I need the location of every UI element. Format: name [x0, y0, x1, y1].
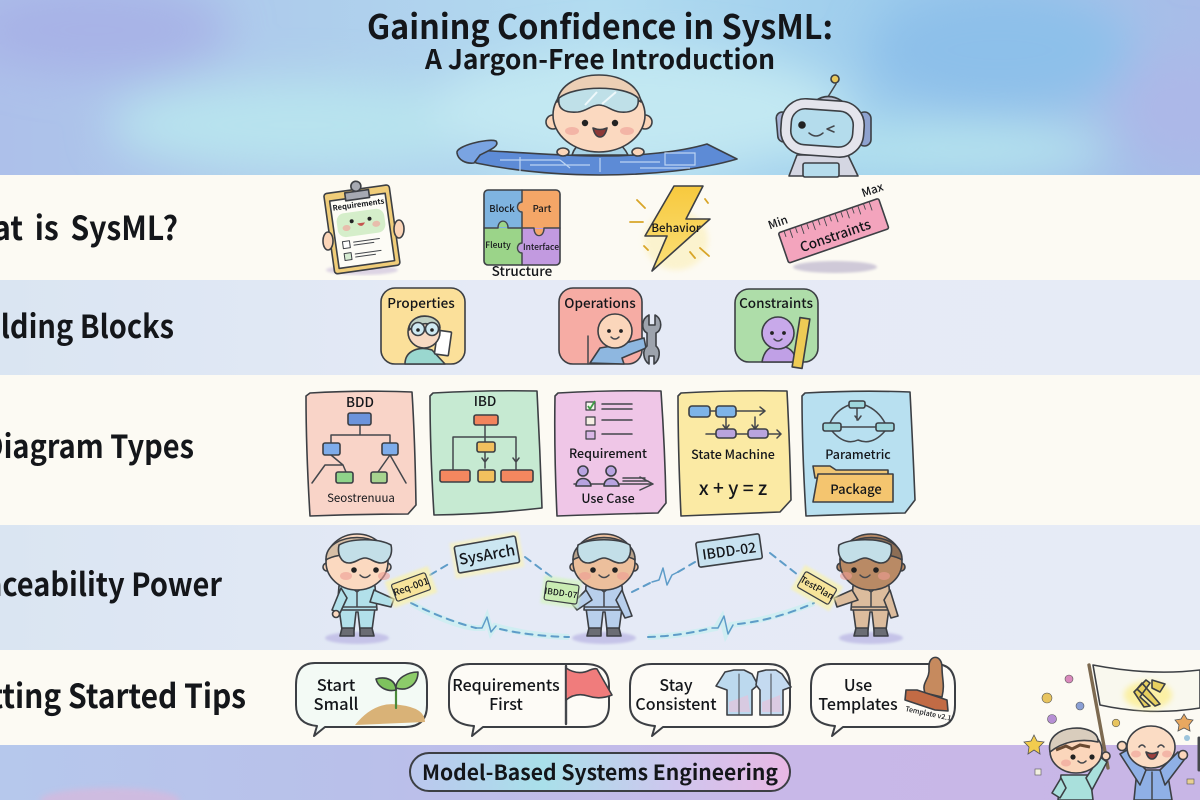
icon: constraints ruler: Min	[766, 212, 790, 233]
celebration: engineers with flag and confetti	[1024, 665, 1200, 800]
diagram card: parametric and package	[802, 391, 915, 516]
worker: left engineer	[323, 534, 394, 644]
diagram card: requirement and use case	[555, 391, 666, 516]
tip bubble: start small	[296, 663, 427, 736]
icon: constraints ruler: Constraints	[797, 213, 873, 256]
icon: structure puzzle: Fleuty	[485, 239, 511, 251]
title: Gaining Confidence in SysML:	[367, 0, 833, 49]
card: constraints: Constraints	[739, 292, 813, 312]
diagram card: parametric and package: Parametric	[825, 444, 891, 463]
tip bubble: use templates: Templates	[818, 691, 898, 715]
tip bubble: use templates	[811, 657, 955, 736]
flag	[1089, 665, 1200, 768]
tag: IBDD-07: IBDD-07	[544, 585, 578, 601]
tag: SysArch: SysArch	[457, 539, 517, 570]
header background	[0, 0, 1200, 180]
tip bubble: requirements first	[449, 664, 612, 736]
tag: Req-001: Req-001	[391, 573, 431, 599]
tip bubble: requirements first: Requirements	[452, 672, 560, 696]
diagram card: state machine	[678, 391, 791, 516]
confetti	[1024, 675, 1194, 784]
card: operations: Operations	[564, 292, 636, 312]
card: constraints	[735, 289, 818, 368]
tip bubble: stay consistent: Consistent	[635, 691, 717, 715]
tag: IBDD-02	[696, 534, 762, 567]
collar and shoulders	[572, 138, 628, 155]
diagram card: requirement and use case: Use Case	[581, 488, 635, 507]
icon: requirements clipboard	[322, 177, 404, 275]
icon: constraints ruler: Max	[859, 179, 886, 201]
worker: right engineer	[834, 534, 905, 644]
card: operations	[559, 288, 661, 364]
diagram card: state machine: x + y = z	[699, 474, 767, 501]
tip bubble: stay consistent	[630, 664, 791, 736]
icon: structure puzzle	[484, 190, 560, 280]
section bands	[0, 175, 1200, 746]
footer pill: Model-Based Systems Engineering	[422, 757, 778, 787]
tag: SysArch	[449, 531, 525, 579]
icon: structure puzzle: Interface	[523, 241, 559, 253]
icon: behavior lightning bolt: Behavior	[651, 220, 701, 236]
tag: IBDD-07	[540, 576, 582, 609]
traceability links	[411, 553, 814, 637]
card: properties	[381, 288, 465, 364]
head	[546, 75, 652, 152]
left cheering engineer	[1050, 728, 1110, 800]
label: structure: Structure	[492, 260, 553, 280]
diagram card: BDD: BDD	[346, 391, 374, 411]
robot mascot	[776, 75, 871, 177]
tip bubble: use templates: Template v2.1	[904, 704, 952, 724]
engineer with blueprint	[457, 75, 737, 175]
diagram card: state machine: State Machine	[691, 444, 775, 463]
tip bubble: requirements first: First	[489, 691, 524, 715]
tag: IBDD-02: IBDD-02	[701, 537, 757, 565]
icon: structure puzzle: Block	[489, 201, 515, 215]
tag: TestPlan: TestPlan	[798, 573, 836, 602]
diagram card: requirement and use case: Requirement	[569, 443, 647, 462]
tag: TestPlan	[791, 565, 843, 611]
icon: structure puzzle: Part	[533, 201, 552, 215]
tip bubble: start small: Small	[314, 691, 359, 715]
hands	[557, 148, 569, 156]
diagram card: IBD: IBD	[474, 390, 496, 410]
right cheering engineer	[1118, 726, 1188, 800]
card: properties: Properties	[387, 292, 455, 312]
icon: requirements clipboard: Requirements	[332, 196, 385, 214]
icon: behavior lightning bolt	[630, 186, 710, 271]
diagram card: IBD	[430, 390, 542, 515]
tip bubble: stay consistent: Stay	[659, 672, 693, 696]
tip bubble: use templates: Use	[844, 672, 872, 696]
diagram card: BDD	[306, 391, 416, 516]
icon: constraints ruler	[766, 179, 897, 273]
tip bubble: start small: Start	[317, 672, 356, 696]
blueprint sheet	[457, 140, 737, 175]
subtitle: A Jargon-Free Introduction	[424, 38, 775, 77]
diagram card: BDD: Seostrenuua	[327, 490, 395, 506]
worker: middle engineer	[570, 534, 638, 644]
tag: Req-001	[385, 566, 437, 608]
footer background	[0, 745, 1200, 800]
edge of third engineer's arm	[1198, 738, 1200, 770]
diagram card: parametric and package: Package	[830, 479, 882, 498]
